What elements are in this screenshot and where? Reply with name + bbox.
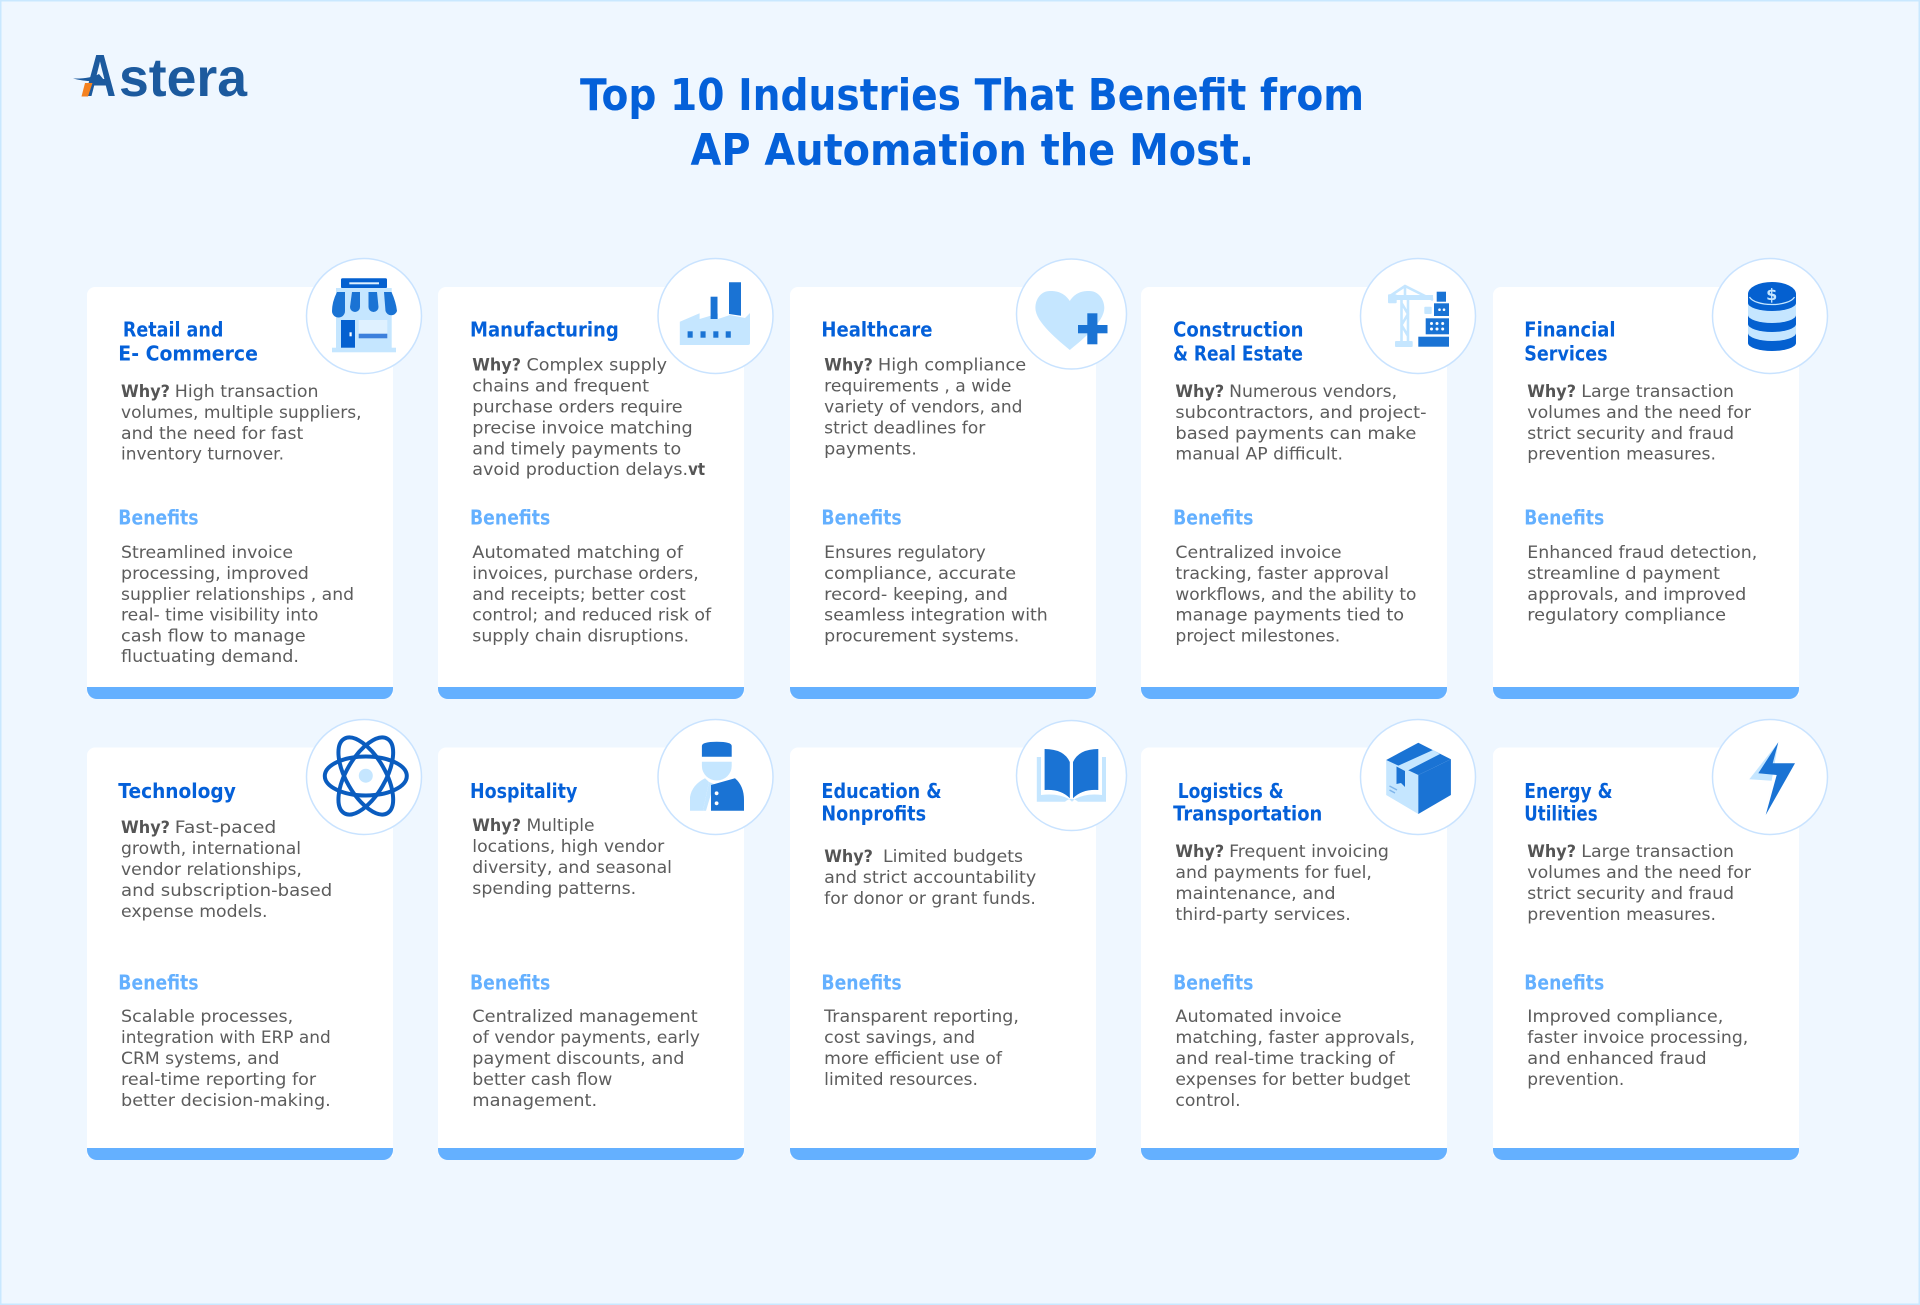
- benefits text: cash flow to manage: [121, 626, 306, 646]
- benefits text: supply chain disruptions.: [472, 626, 689, 646]
- panel: Logistics and Transportation: [1141, 720, 1476, 1160]
- benefits text: Enhanced fraud detection,: [1527, 543, 1757, 563]
- benefits heading: Benefits: [1173, 506, 1253, 530]
- benefits heading: Benefits: [821, 970, 902, 994]
- benefits text: supplier relationships , and: [121, 585, 354, 605]
- heading: Technology: [118, 779, 236, 803]
- card background: [1141, 748, 1447, 1156]
- benefits text: Transparent reporting,: [823, 1007, 1019, 1027]
- benefits text: more efficient use of: [824, 1049, 1003, 1069]
- title: AP Automation the Most.: [690, 125, 1254, 176]
- benefits text: Scalable processes,: [121, 1007, 293, 1027]
- benefits text: faster invoice processing,: [1527, 1028, 1748, 1048]
- heading: Retail and: [123, 318, 223, 342]
- heading: Manufacturing: [470, 318, 619, 342]
- benefits text: record- keeping, and: [824, 585, 1008, 605]
- why text: volumes and the need for: [1527, 403, 1751, 423]
- heading: Logistics &: [1178, 779, 1284, 803]
- why text: manual AP difficult.: [1175, 444, 1343, 464]
- benefits text: of vendor payments, early: [472, 1028, 700, 1048]
- heading: Education &: [821, 779, 942, 803]
- panel: Manufacturing: [438, 258, 773, 699]
- why text: variety of vendors, and: [824, 398, 1022, 418]
- benefits heading: Benefits: [1173, 970, 1253, 994]
- why text: Why?: [824, 356, 873, 376]
- logo: Astera: A: [84, 43, 116, 109]
- benefits text: Improved compliance,: [1527, 1007, 1723, 1027]
- benefits text: workflows, and the ability to: [1175, 585, 1416, 605]
- why text: diversity, and seasonal: [472, 858, 672, 878]
- benefits text: payment discounts, and: [472, 1049, 684, 1069]
- why text: Why?: [1175, 382, 1224, 402]
- benefits text: tracking, faster approval: [1175, 564, 1389, 584]
- heading: Financial: [1524, 318, 1616, 342]
- heading: Nonprofits: [821, 802, 926, 826]
- why text: Multiple: [526, 816, 594, 836]
- heading: & Real Estate: [1173, 342, 1303, 366]
- heading: Utilities: [1524, 802, 1598, 826]
- benefits text: seamless integration with: [824, 606, 1048, 626]
- benefits text: cost savings, and: [824, 1028, 975, 1048]
- why text: for donor or grant funds.: [824, 889, 1036, 909]
- benefits heading: Benefits: [470, 506, 550, 530]
- card background: [1493, 287, 1799, 695]
- card background: [790, 748, 1096, 1156]
- why text: Large transaction: [1581, 382, 1734, 402]
- icon: lightning bolt: [1712, 720, 1828, 834]
- why text: based payments can make: [1175, 424, 1416, 444]
- why text: Why?: [824, 847, 873, 867]
- why text: subcontractors, and project-: [1175, 403, 1426, 423]
- why text: precise invoice matching: [472, 418, 693, 438]
- benefits text: Centralized management: [472, 1007, 698, 1027]
- why text: strict security and fraud: [1527, 884, 1734, 904]
- why text: strict deadlines for: [824, 418, 985, 438]
- benefits text: better cash flow: [472, 1070, 612, 1090]
- panel: Energy and Utilities: [1493, 720, 1828, 1160]
- benefits heading: Benefits: [470, 970, 550, 994]
- card background: [1493, 748, 1799, 1156]
- why text: growth, international: [121, 839, 301, 859]
- benefits text: CRM systems, and: [121, 1049, 279, 1069]
- benefits heading: Benefits: [821, 506, 902, 530]
- why text: purchase orders require: [472, 398, 683, 418]
- heading: E- Commerce: [118, 342, 258, 366]
- card background: [87, 748, 393, 1156]
- why text: requirements , a wide: [824, 377, 1012, 397]
- why text: and subscription-based: [121, 881, 332, 901]
- card background: [438, 287, 744, 695]
- benefits text: integration with ERP and: [121, 1028, 331, 1048]
- why text: expense models.: [121, 902, 268, 922]
- why text: prevention measures.: [1527, 444, 1716, 464]
- benefits text: invoices, purchase orders,: [472, 564, 699, 584]
- why text: and payments for fuel,: [1175, 863, 1372, 883]
- benefits text: expenses for better budget: [1175, 1070, 1411, 1090]
- benefits text: fluctuating demand.: [121, 647, 299, 667]
- why text: Why?: [1175, 842, 1224, 862]
- heading: Healthcare: [821, 318, 932, 342]
- card accent bar: [1141, 687, 1447, 699]
- why text: spending patterns.: [472, 879, 636, 899]
- icon: factory: [658, 258, 773, 374]
- benefits text: Centralized invoice: [1175, 543, 1342, 563]
- benefits text: matching, faster approvals,: [1175, 1028, 1415, 1048]
- benefits text: prevention.: [1527, 1070, 1624, 1090]
- why text: prevention measures.: [1527, 905, 1716, 925]
- panel: Hospitality: [438, 720, 773, 1160]
- icon: atom: [306, 720, 422, 834]
- card accent bar: [1141, 1148, 1447, 1160]
- card accent bar: [790, 1148, 1096, 1160]
- benefits text: and receipts; better cost: [472, 585, 686, 605]
- benefits text: approvals, and improved: [1527, 585, 1746, 605]
- card background: [438, 748, 744, 1156]
- heading: Transportation: [1173, 802, 1322, 826]
- why text: vt: [688, 460, 705, 480]
- icon: coin stack: $: [1766, 285, 1777, 304]
- why text: volumes, multiple suppliers,: [121, 403, 362, 423]
- benefits text: limited resources.: [824, 1070, 978, 1090]
- title: Top 10 Industries That Benefit from: [580, 70, 1364, 121]
- benefits text: control.: [1175, 1091, 1241, 1111]
- card accent bar: [87, 1148, 393, 1160]
- logo: Astera: [73, 43, 248, 109]
- why text: Large transaction: [1581, 842, 1734, 862]
- benefits text: manage payments tied to: [1175, 606, 1404, 626]
- card accent bar: [438, 1148, 744, 1160]
- card background: [87, 287, 393, 695]
- icon: package box: [1360, 720, 1476, 834]
- benefits text: real-time reporting for: [121, 1070, 316, 1090]
- heading: Construction: [1173, 318, 1304, 342]
- benefits text: project milestones.: [1175, 626, 1340, 646]
- heading: Hospitality: [470, 779, 577, 803]
- why text: and the need for fast: [121, 424, 304, 444]
- benefits text: regulatory compliance: [1527, 606, 1726, 626]
- why text: payments.: [824, 439, 917, 459]
- why text: Why?: [1527, 382, 1576, 402]
- why text: Numerous vendors,: [1229, 382, 1397, 402]
- benefits heading: Benefits: [1524, 970, 1604, 994]
- panel: Technology: [87, 720, 422, 1160]
- icon: storefront: [306, 258, 422, 374]
- benefits text: Streamlined invoice: [121, 543, 293, 563]
- benefits text: compliance, accurate: [824, 564, 1016, 584]
- why text: Complex supply: [526, 356, 667, 376]
- why text: Why?: [472, 816, 521, 836]
- benefits text: better decision-making.: [121, 1091, 331, 1111]
- panel: Healthcare: [790, 259, 1126, 699]
- why text: locations, high vendor: [472, 837, 664, 857]
- why text: and timely payments to: [472, 439, 681, 459]
- why text: and strict accountability: [824, 868, 1036, 888]
- benefits heading: Benefits: [118, 970, 199, 994]
- why text: Frequent invoicing: [1229, 842, 1389, 862]
- logo: Astera: stera: [119, 48, 248, 108]
- benefits text: control; and reduced risk of: [472, 606, 712, 626]
- why text: Why?: [121, 818, 170, 838]
- why text: avoid production delays.: [472, 460, 688, 480]
- icon: bellhop: [658, 720, 773, 834]
- why text: strict security and fraud: [1527, 424, 1734, 444]
- benefits text: management.: [472, 1091, 597, 1111]
- icon: heart with plus: [1016, 259, 1126, 369]
- heading: Energy &: [1524, 779, 1613, 803]
- card accent bar: [790, 687, 1096, 699]
- card accent bar: [1493, 687, 1799, 699]
- benefits text: Ensures regulatory: [824, 543, 986, 563]
- benefits text: Automated invoice: [1175, 1007, 1342, 1027]
- icon: open book: [1016, 720, 1126, 830]
- why text: chains and frequent: [472, 377, 649, 397]
- why text: Why?: [472, 356, 521, 376]
- benefits text: Automated matching of: [472, 543, 684, 563]
- why text: Fast-paced: [175, 818, 276, 838]
- panel: Education and Nonprofits: [790, 720, 1126, 1160]
- card background: [790, 287, 1096, 695]
- icon: crane and building: [1360, 258, 1476, 374]
- why text: High compliance: [878, 356, 1026, 376]
- card accent bar: [1493, 1148, 1799, 1160]
- why text: maintenance, and: [1175, 884, 1336, 904]
- benefits text: and enhanced fraud: [1527, 1049, 1707, 1069]
- benefits text: procurement systems.: [824, 626, 1019, 646]
- why text: Why?: [121, 382, 170, 402]
- why text: volumes and the need for: [1527, 863, 1751, 883]
- card accent bar: [87, 687, 393, 699]
- panel: Retail and E-Commerce: [87, 258, 422, 699]
- card accent bar: [438, 687, 744, 699]
- benefits text: real- time visibility into: [121, 606, 318, 626]
- panel: Financial Services: [1493, 258, 1828, 699]
- panel: Construction and Real Estate: [1141, 258, 1476, 699]
- benefits heading: Benefits: [118, 506, 199, 530]
- why text: Why?: [1527, 842, 1576, 862]
- why text: inventory turnover.: [121, 444, 284, 464]
- icon: coin stack: [1712, 258, 1828, 374]
- benefits text: and real-time tracking of: [1175, 1049, 1396, 1069]
- card background: [1141, 287, 1447, 695]
- why text: vendor relationships,: [121, 860, 302, 880]
- benefits text: streamline d payment: [1527, 564, 1720, 584]
- why text: Limited budgets: [883, 847, 1023, 867]
- why text: third-party services.: [1175, 905, 1351, 925]
- why text: High transaction: [175, 382, 318, 402]
- benefits text: processing, improved: [121, 564, 309, 584]
- heading: Services: [1524, 342, 1608, 366]
- benefits heading: Benefits: [1524, 506, 1604, 530]
